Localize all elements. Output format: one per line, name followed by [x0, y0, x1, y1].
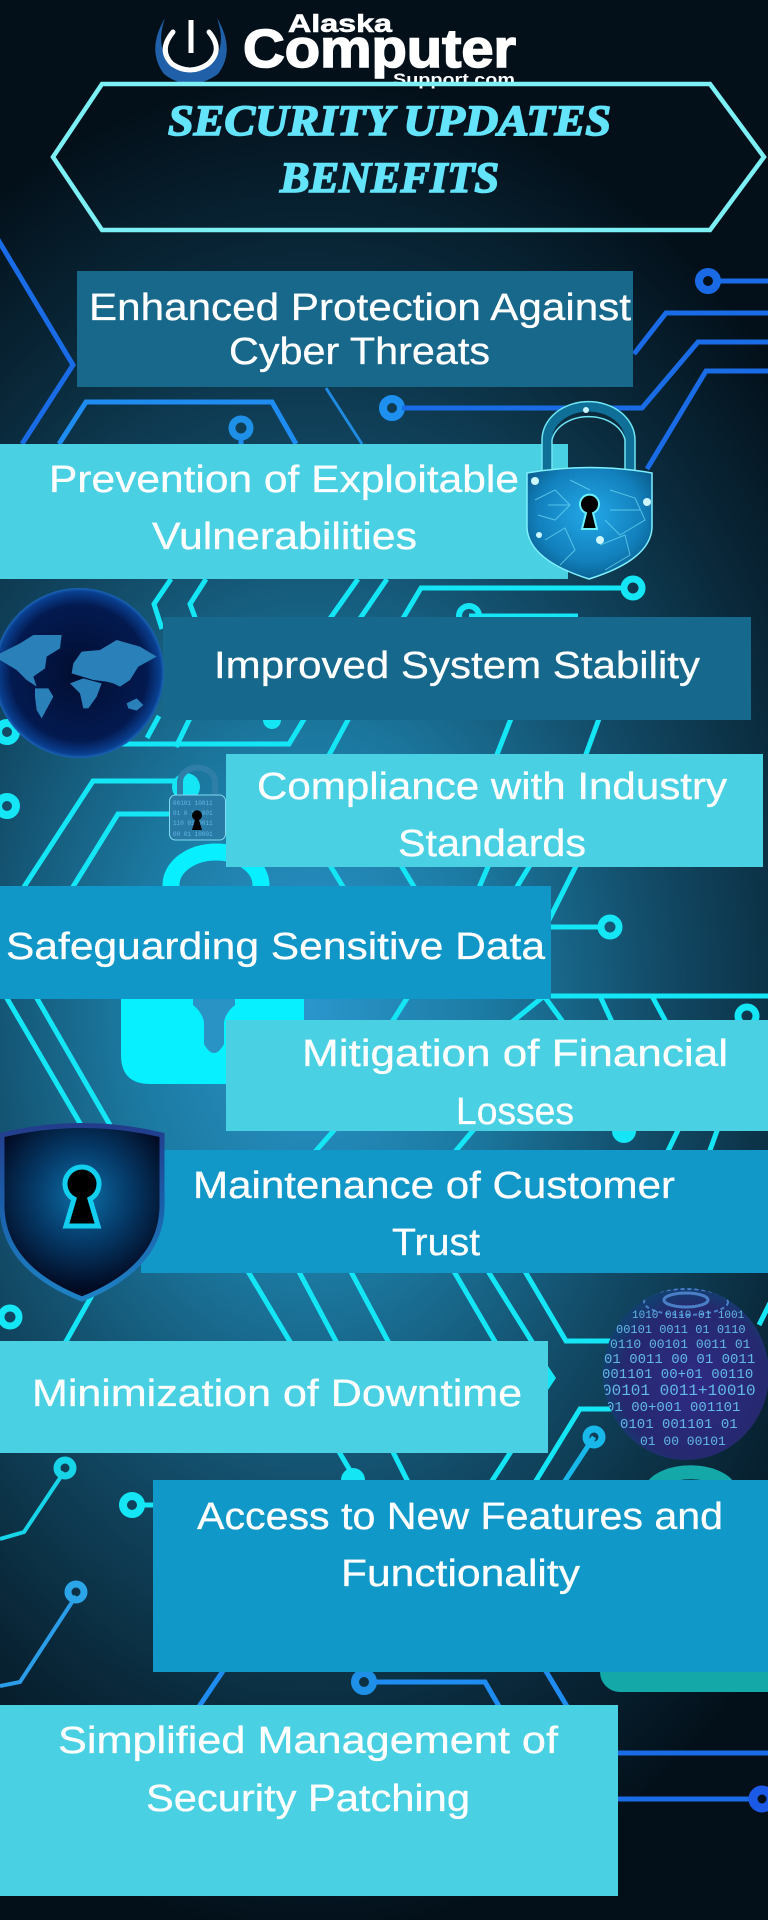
panel: enhanced protection: Enhanced Protection Against	[89, 287, 631, 329]
icon: binary globe: 01 0011 00 01 0011	[604, 1352, 755, 1368]
panel: prevention of vulnerabilities	[0, 444, 568, 579]
title banner	[53, 84, 764, 230]
logo: Support.com	[393, 70, 515, 89]
panel: maintenance of customer trust: Trust	[392, 1222, 480, 1264]
panel: safeguarding sensitive data: Safeguarding Sensitive Data	[6, 926, 546, 968]
icon: keyhole shield	[2, 1126, 162, 1299]
panel: mitigation of financial losses: Losses	[456, 1091, 574, 1133]
icon: small binary padlock: 00 01 10001	[173, 831, 213, 838]
panel: maintenance of customer trust: Maintenance of Customer	[193, 1165, 675, 1207]
icon: binary globe: 001101 00+01 00110	[602, 1367, 753, 1383]
icon: binary globe	[602, 1288, 768, 1460]
panel: simplified management	[0, 1705, 618, 1896]
panel: maintenance of customer trust	[141, 1150, 768, 1273]
icon: binary globe: 00101 0011+10010	[602, 1382, 756, 1400]
circuit traces: upper blue	[0, 238, 768, 469]
panel: access to new features: Functionality	[341, 1553, 580, 1595]
panel: enhanced protection	[77, 271, 633, 387]
icon: binary globe: 01 00 00101	[640, 1434, 726, 1449]
panel: improved system stability: Improved System Stability	[214, 645, 700, 687]
icon: circuit padlock shield	[527, 402, 652, 579]
background padlock: shackle and body	[121, 852, 304, 1084]
panel: access to new features: Access to New Features and	[197, 1496, 723, 1538]
logo: Computer	[243, 19, 516, 79]
icon: small binary padlock: 00101 10011	[173, 800, 213, 807]
panel: safeguarding sensitive data	[0, 886, 551, 999]
icon: binary globe: 0110 00101 0011 01	[610, 1337, 751, 1352]
panel: minimization of downtime	[0, 1341, 548, 1453]
panel: mitigation of financial losses	[226, 1020, 768, 1133]
icon: digital globe with continents	[0, 588, 164, 758]
panel: prevention of vulnerabilities: Vulnerabilities	[152, 516, 417, 558]
logo	[155, 10, 516, 89]
circuit traces: lower	[0, 1268, 768, 1808]
icon: binary globe: 1010 0110 01 1001	[632, 1310, 745, 1322]
panel: compliance	[226, 754, 763, 867]
panel: enhanced protection: Cyber Threats	[229, 331, 490, 373]
icon: small binary padlock	[170, 768, 226, 840]
icon: small binary padlock: 01 0 11 001	[173, 810, 213, 817]
panel: access to new features	[153, 1480, 768, 1672]
panel: improved system stability	[163, 617, 751, 720]
panel: simplified management: Security Patching	[146, 1778, 470, 1820]
panel: simplified management: Simplified Management of	[58, 1720, 558, 1762]
title banner: SECURITY UPDATES	[168, 98, 611, 145]
panel: compliance: Compliance with Industry	[257, 766, 727, 808]
panel: prevention of vulnerabilities: Prevention of Exploitable	[49, 459, 519, 501]
panel: minimization of downtime: Minimization of Downtime	[32, 1373, 522, 1415]
icon: binary globe: 0101 001101 01	[620, 1417, 738, 1433]
panel: compliance: Standards	[398, 823, 586, 865]
title banner: BENEFITS	[279, 155, 499, 202]
icon: binary globe: 01 00+001 001101	[606, 1400, 740, 1416]
icon: binary globe: 00101 0011 01 0110	[616, 1323, 746, 1337]
icon: power symbol	[155, 18, 227, 84]
circuit traces: middle cyan	[0, 579, 768, 1153]
panel: mitigation of financial losses: Mitigation of Financial	[302, 1033, 728, 1075]
logo: Alaska	[288, 10, 393, 38]
icon: small binary padlock: 110 01 0011	[173, 820, 213, 827]
